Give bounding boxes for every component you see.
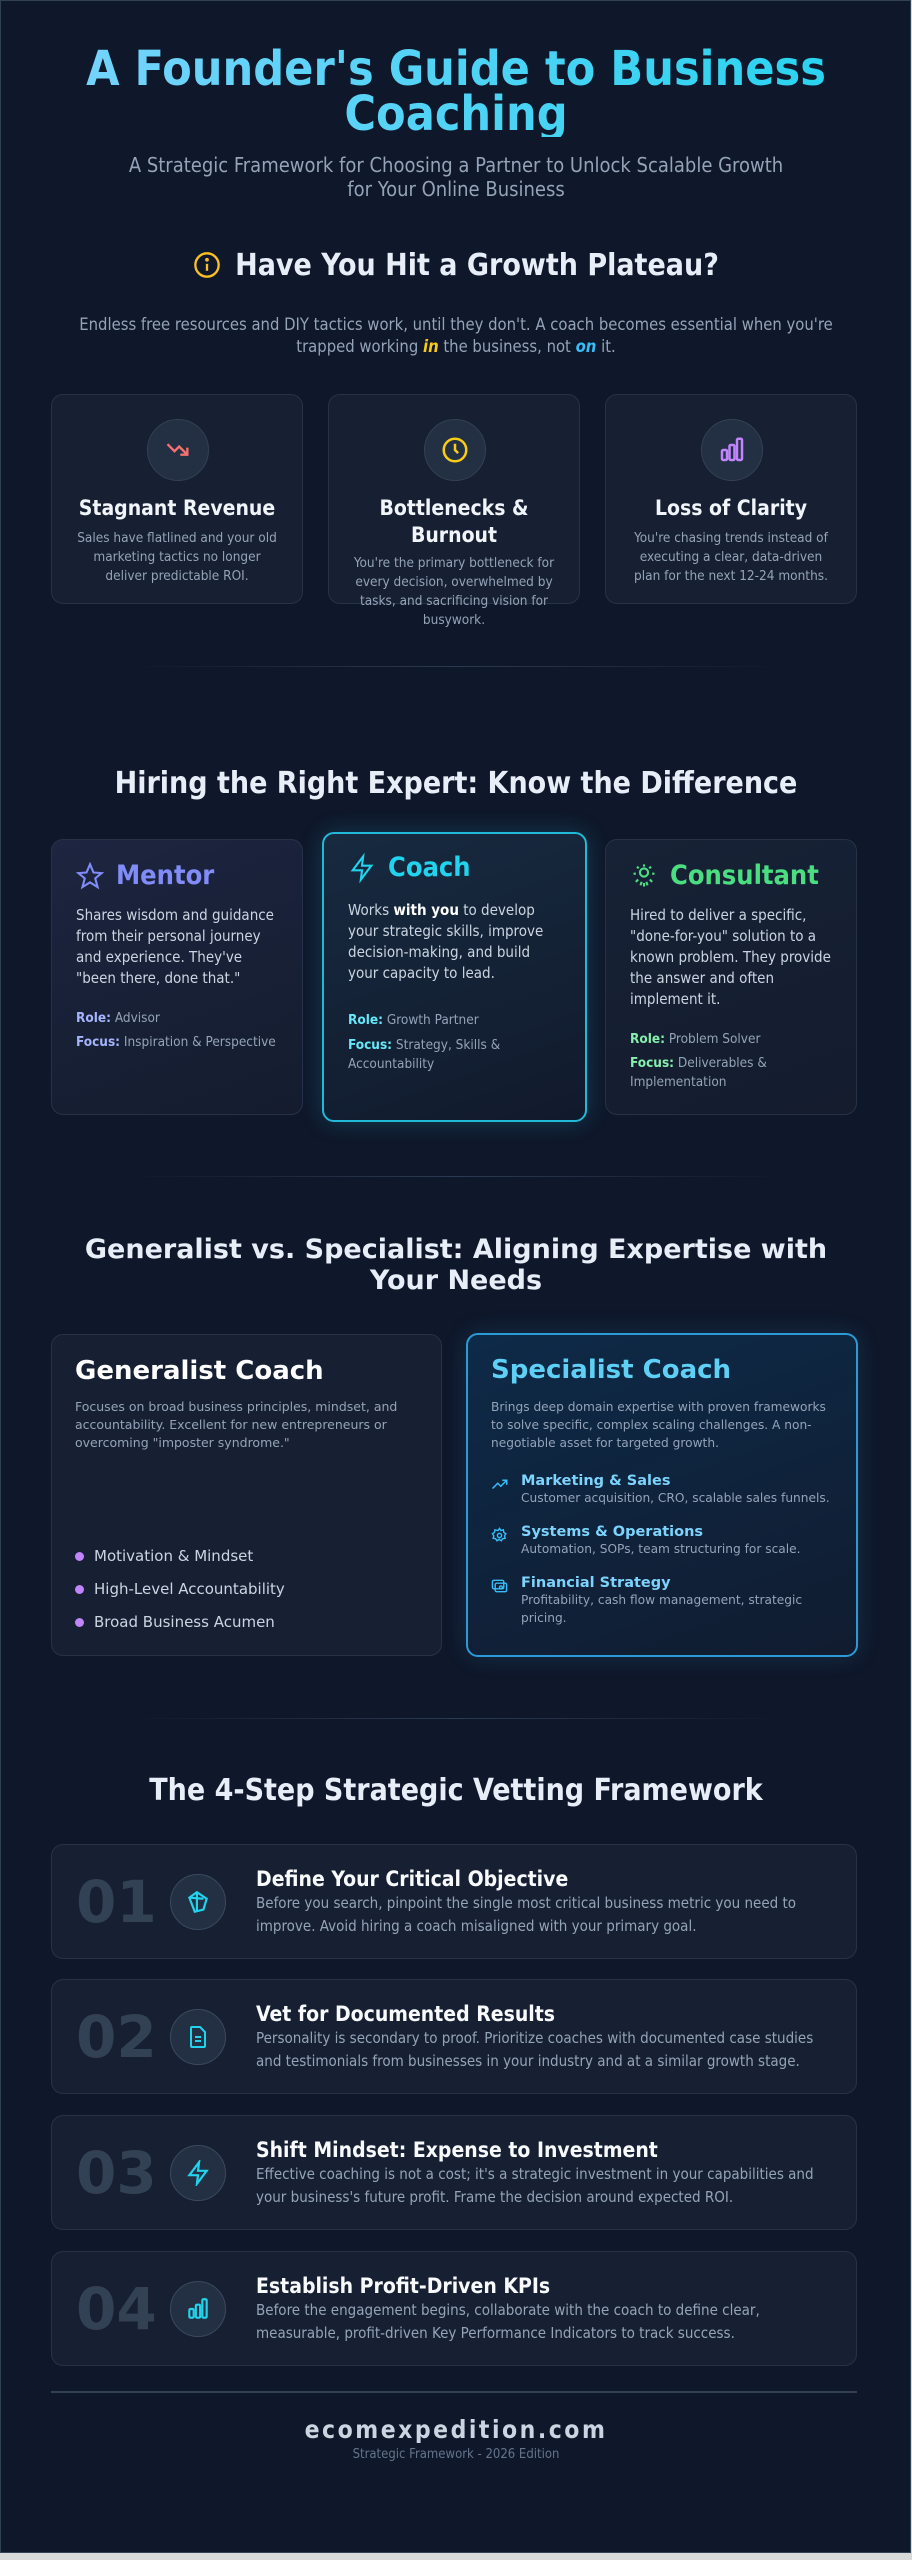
heading: generalist vs specialist: Your Needs [370, 1265, 542, 1296]
step 01 [51, 1844, 857, 1959]
card: loss of clarity [605, 394, 857, 604]
icon: info [194, 252, 220, 278]
card: coach: Focus: Strategy, Skills & Accountability [348, 1037, 500, 1072]
panel: generalist coach: Focuses on broad business principles, mindset, and accountability. Excellent for new entrepreneurs or overcoming "imposter syndrome." [75, 1399, 397, 1450]
step 01: Before you search, pinpoint the single most critical business metric you need to improve. Avoid hiring a coach misaligned with your primary goal. [256, 1894, 796, 1935]
card: stagnant revenue: Sales have flatlined and your old marketing tactics no longer deliver predictable ROI. [77, 530, 277, 584]
item: systems: Automation, SOPs, team structuring for scale. [521, 1542, 800, 1556]
step 01: Define Your Critical Objective [256, 1867, 568, 1891]
card: stagnant revenue: Stagnant Revenue [79, 496, 275, 520]
card: bottlenecks [328, 394, 580, 604]
footer: ecomexpedition.com [305, 2415, 607, 2444]
item: marketing: Marketing & Sales [521, 1473, 670, 1489]
step 02: Personality is secondary to proof. Prioritize coaches with documented case studies and testimonials from businesses in your industry and at a similar growth stage. [256, 2029, 813, 2070]
step 01: 01 [76, 1868, 157, 1936]
coach heading [350, 852, 471, 883]
panel: specialist coach: Specialist Coach [491, 1355, 731, 1385]
bullet list: Motivation & Mindset [94, 1547, 253, 1565]
title: A Founder's Guide to Business [86, 41, 826, 97]
panel: generalist coach [51, 1334, 442, 1656]
footer [305, 2415, 607, 2462]
step 04: 04 [76, 2275, 157, 2343]
heading: 4-step framework: The 4-Step Strategic Vetting Framework [149, 1773, 763, 1808]
bullet list: Broad Business Acumen [94, 1613, 275, 1631]
icon: target [170, 1874, 226, 1930]
step 04: Establish Profit-Driven KPIs [256, 2274, 550, 2298]
heading: hiring the right expert: Hiring the Right Expert: Know the Difference [115, 766, 797, 801]
icon: chart [170, 2281, 226, 2337]
icon: document [170, 2009, 226, 2065]
panel: specialist coach: Brings deep domain expertise with proven frameworks to solve specific, complex scaling challenges. A non-negotiable asset for targeted growth. [491, 1400, 826, 1450]
step 03 [51, 2115, 857, 2230]
mentor heading: Mentor [116, 860, 214, 891]
item: financial: Financial Strategy [521, 1575, 671, 1591]
step 04 [51, 2251, 857, 2366]
heading: generalist vs specialist [85, 1234, 827, 1296]
step 03: 03 [76, 2139, 157, 2207]
icon: clock [424, 419, 486, 481]
card: consultant: Role: Problem Solver [630, 1031, 760, 1047]
panel: specialist coach [466, 1333, 858, 1657]
subtitle: A Strategic Framework for Choosing a Partner to Unlock Scalable Growth [129, 153, 783, 177]
card: coach: Works with you to develop your strategic skills, improve decision-making, and build your capacity to lead. [348, 901, 543, 982]
card: bottlenecks: You're the primary bottleneck for every decision, overwhelmed by tasks, and sacrificing vision for busywork. [354, 555, 554, 628]
heading: generalist vs specialist: Generalist vs. Specialist: Aligning Expertise with [85, 1234, 827, 1265]
icon: lightning [170, 2145, 226, 2201]
title [1, 47, 911, 137]
icon: bar chart [701, 419, 763, 481]
step 03: Shift Mindset: Expense to Investment [256, 2138, 658, 2162]
card: mentor: Shares wisdom and guidance from their personal journey and experience. They've "been there, done that." [76, 906, 274, 987]
card: bottlenecks: Burnout [411, 523, 497, 547]
card: consultant: Focus: Deliverables & Implementation [630, 1055, 767, 1090]
intro text: trapped working in the business, not on it. [296, 337, 616, 356]
intro text [79, 315, 833, 356]
heading: growth plateau: Have You Hit a Growth Plateau? [235, 248, 719, 282]
panel: generalist coach: Generalist Coach [75, 1356, 324, 1386]
card: bottlenecks: Bottlenecks & [379, 496, 529, 520]
bullet list: High-Level Accountability [94, 1580, 285, 1598]
card: mentor: Role: Advisor [76, 1010, 160, 1026]
subtitle [129, 153, 783, 201]
step 02 [51, 1979, 857, 2094]
card: loss of clarity: Loss of Clarity [655, 496, 807, 520]
card: stagnant revenue [51, 394, 303, 604]
item: marketing [492, 1473, 830, 1505]
intro text: Endless free resources and DIY tactics work, until they don't. A coach becomes essential when you're [79, 315, 833, 334]
card: mentor: Focus: Inspiration & Perspective [76, 1034, 276, 1050]
item: systems: Systems & Operations [521, 1524, 703, 1540]
coach heading: Coach [388, 852, 471, 883]
card: coach: Role: Growth Partner [348, 1012, 479, 1028]
consultant heading: Consultant [670, 860, 819, 891]
step 02: 02 [76, 2003, 157, 2071]
step 04: Before the engagement begins, collaborate with the coach to define clear, measurable, profit-driven Key Performance Indicators to track success. [256, 2301, 760, 2342]
card: coach [322, 832, 587, 1122]
bullet list [75, 1547, 285, 1631]
footer: Strategic Framework - 2026 Edition [353, 2447, 559, 2462]
icon: trend down [147, 419, 209, 481]
step 03: Effective coaching is not a cost; it's a strategic investment in your capabilities and your business's future profit. Frame the decision around expected ROI. [256, 2165, 814, 2206]
item: marketing: Customer acquisition, CRO, scalable sales funnels. [521, 1491, 830, 1505]
title: Coaching [344, 86, 568, 142]
card: consultant [605, 839, 857, 1115]
item: financial [492, 1575, 802, 1625]
item: financial: Profitability, cash flow management, strategic pricing. [521, 1593, 802, 1625]
step 02: Vet for Documented Results [256, 2002, 555, 2026]
card: loss of clarity: You're chasing trends instead of executing a clear, data-driven plan for the next 12-24 months. [634, 530, 828, 584]
card: mentor [51, 839, 303, 1115]
item: systems [492, 1524, 800, 1556]
subtitle: for Your Online Business [347, 177, 565, 201]
card: consultant: Hired to deliver a specific, "done-for-you" solution to a known problem. They provide the answer and often implement it. [630, 906, 831, 1008]
